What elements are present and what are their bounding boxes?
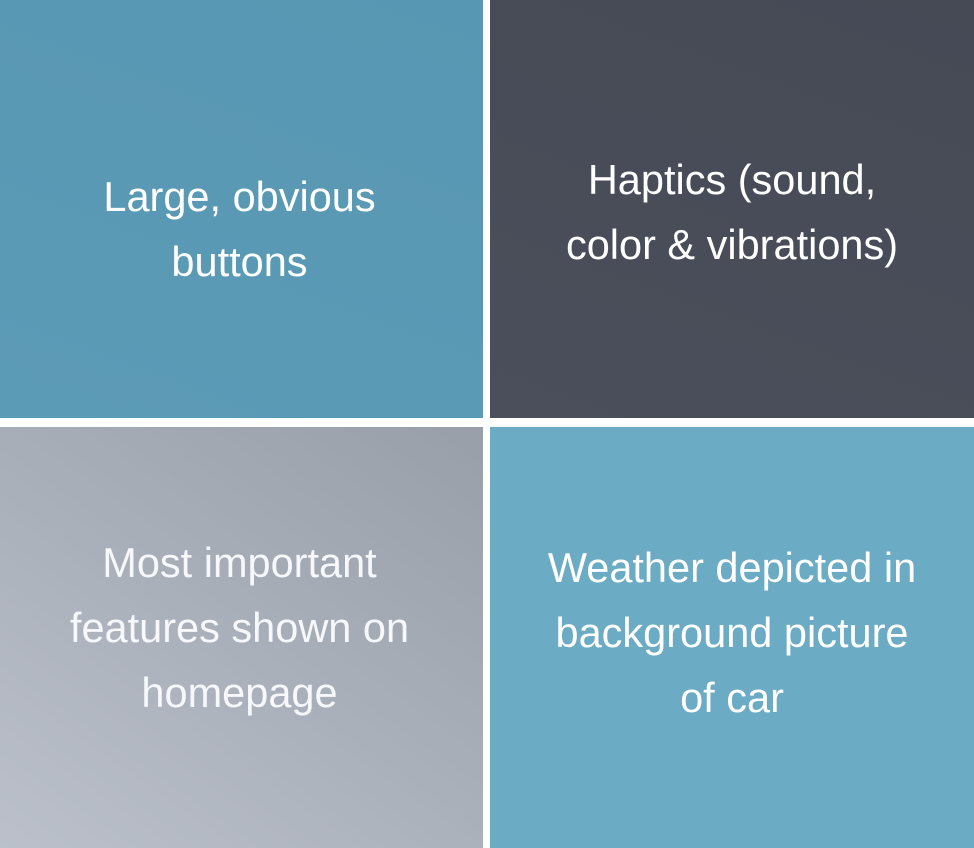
text: large, obvious buttons: buttons [171,238,308,285]
text: most important features: features shown on [70,604,409,651]
text: haptics: Haptics (sound, [588,156,876,203]
text: weather depicted: of car [680,674,784,721]
text: weather depicted: background picture [556,609,908,656]
text: large, obvious buttons: Large, obvious [103,173,376,220]
text: haptics [566,156,898,268]
text: large, obvious buttons [103,173,376,285]
panel: haptics [490,0,974,418]
text: most important features: homepage [141,669,338,716]
panel: large buttons [0,0,483,418]
text: most important features: Most important [102,539,377,586]
text: most important features [70,539,409,716]
panel: most important features [0,427,483,848]
panel: weather [490,427,974,848]
text: haptics: color & vibrations) [566,221,898,268]
text: weather depicted: Weather depicted in [548,544,916,591]
text: weather depicted [548,544,916,721]
